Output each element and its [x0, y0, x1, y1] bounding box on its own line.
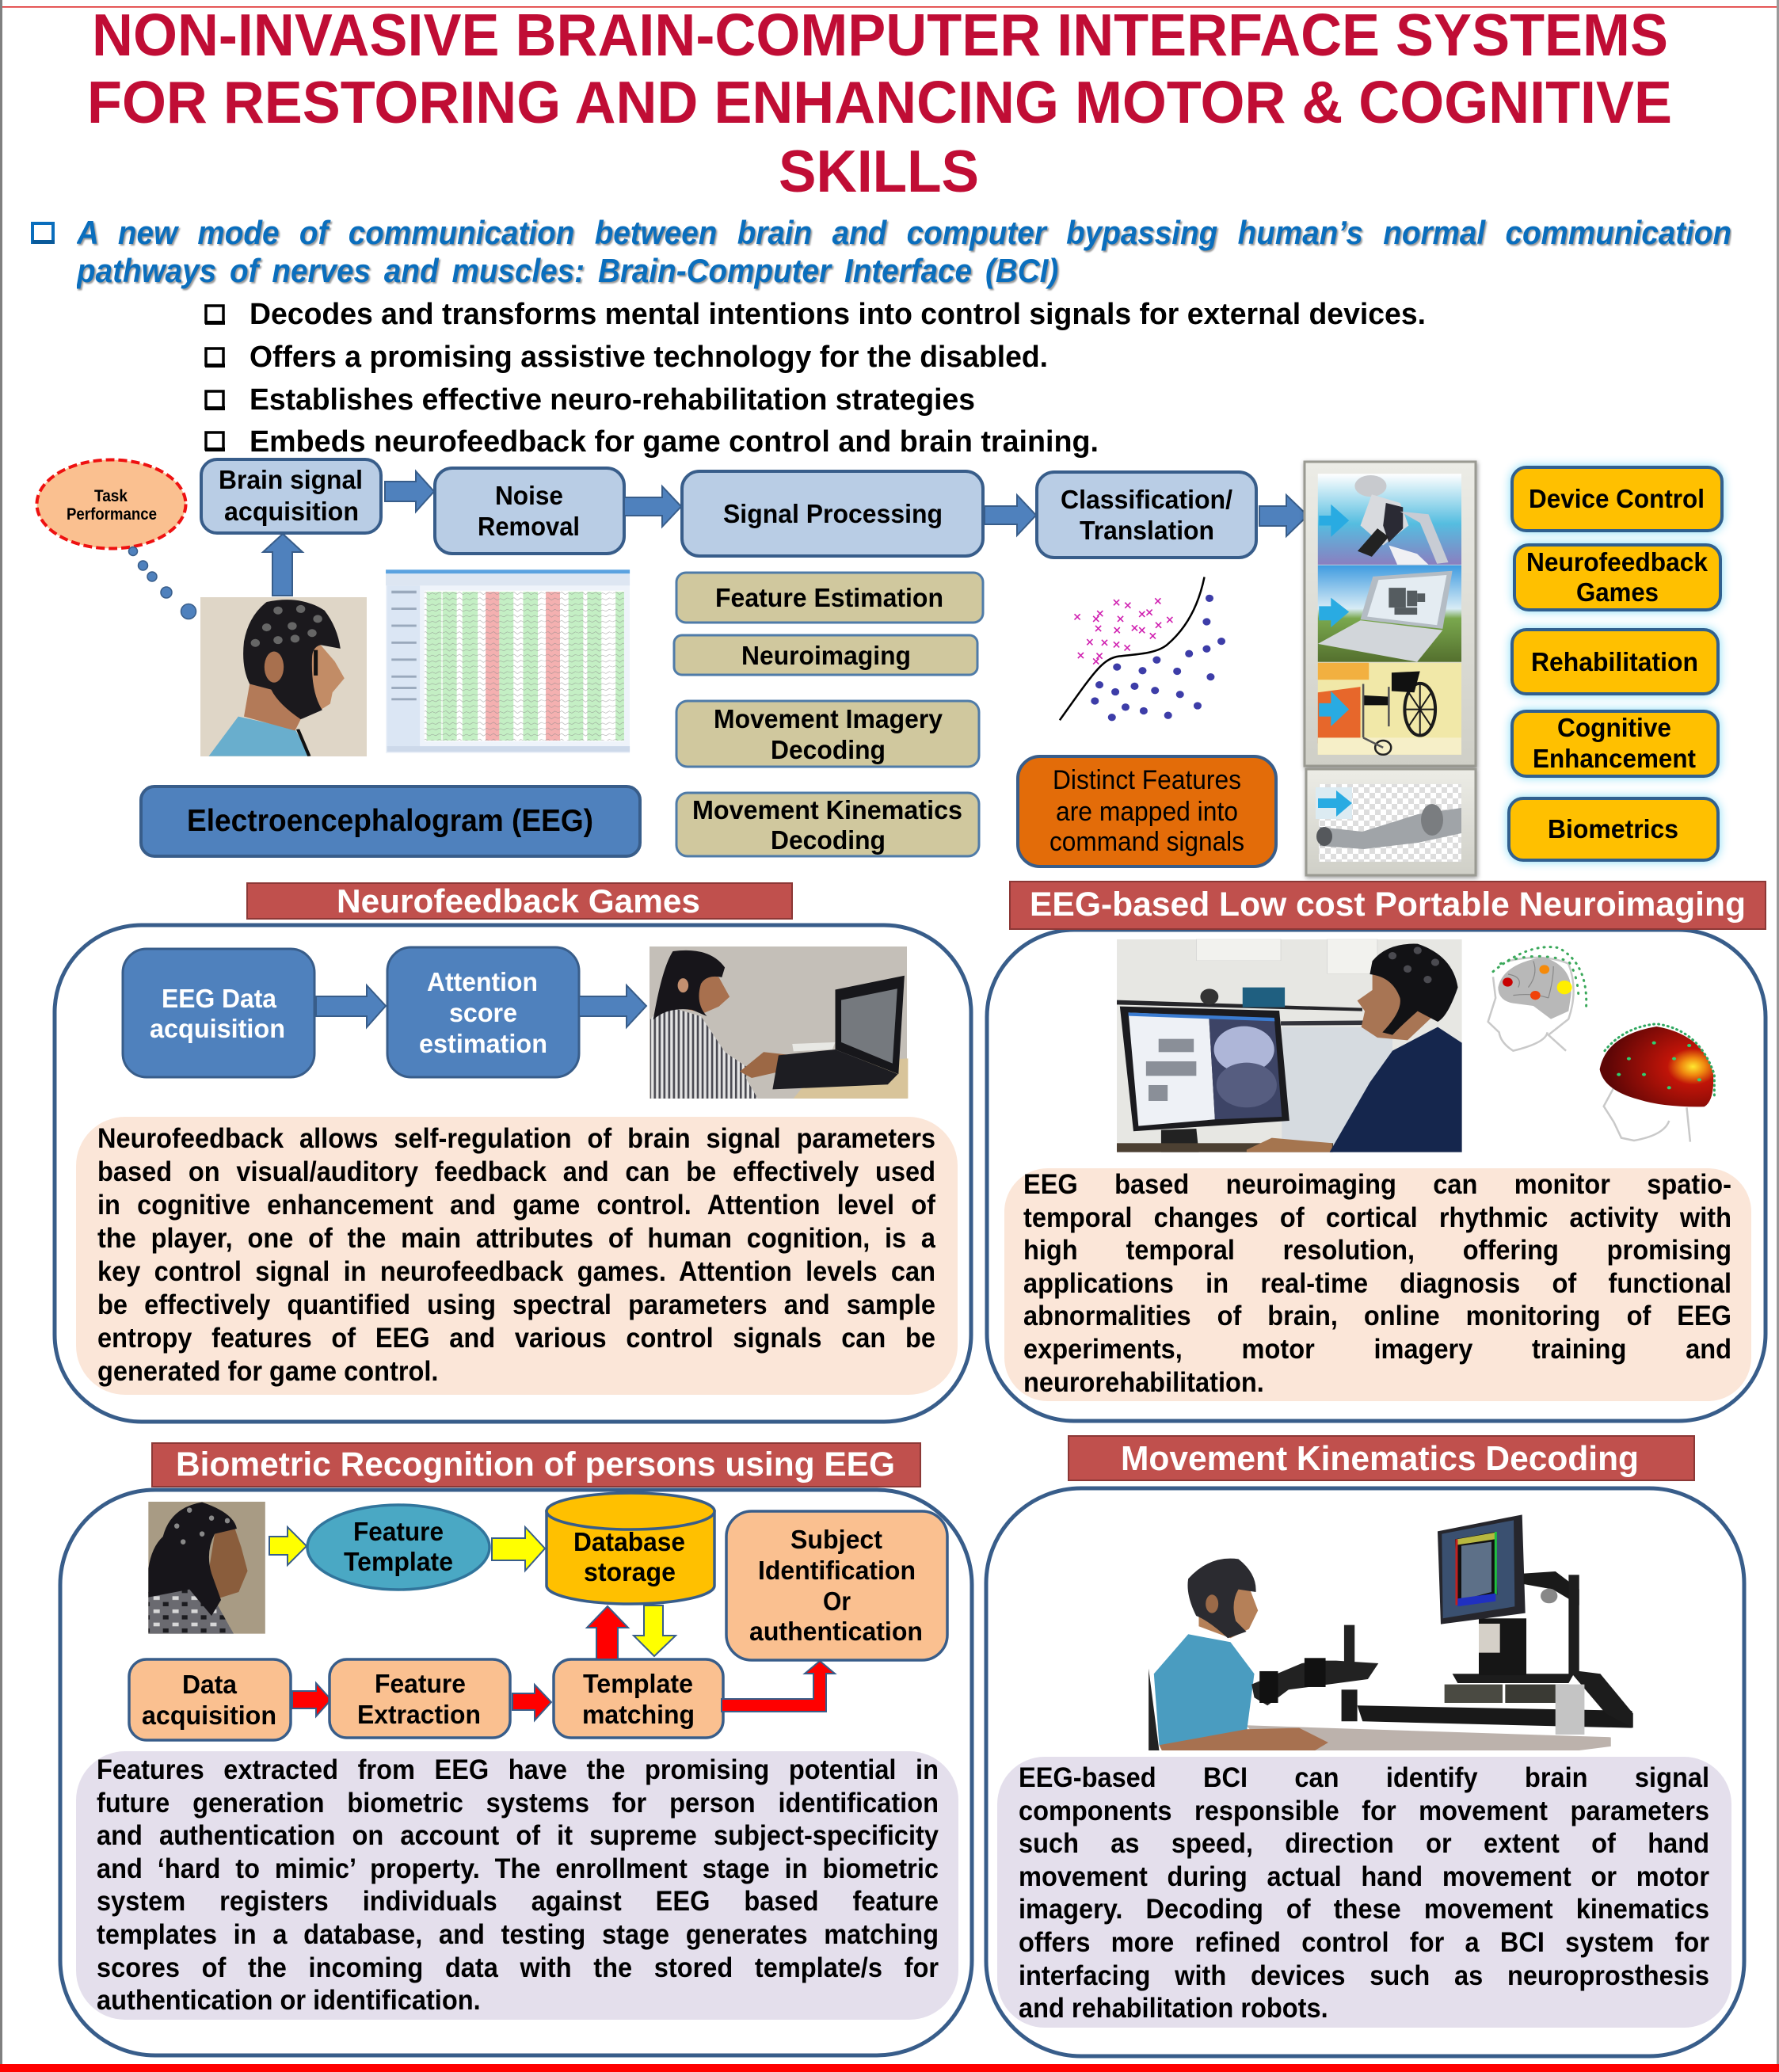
panel: movement kinematics [986, 1436, 1744, 2056]
flow: signal processing: Signal Processing [723, 499, 943, 528]
text block: neuroimaging: abnormalities of brain, online monitoring of EEG [1023, 1301, 1731, 1331]
heading: neurofeedback games: Neurofeedback Games [337, 882, 700, 920]
output: cognitive enhancement: Cognitive [1557, 713, 1671, 742]
bullet list [205, 298, 1426, 459]
output: cognitive enhancement [1512, 711, 1718, 776]
text block: biometrics: and authentication on account of it supreme subject-specificity [97, 1820, 939, 1851]
arrow [492, 1527, 545, 1571]
panel: biometric recognition [60, 1443, 972, 2055]
movement kinematics decoding box: Decoding [771, 825, 886, 855]
feature template ellipse: Template [344, 1547, 453, 1576]
arrow [385, 471, 434, 512]
movement imagery decoding box: Decoding [771, 735, 886, 764]
EEG signal screenshot [386, 569, 630, 753]
text block: neuroimaging [1004, 1168, 1751, 1401]
subject identification box: authentication [749, 1617, 923, 1646]
photo: biometric subject [148, 1502, 265, 1634]
arrow [316, 985, 386, 1027]
elbow arrow to identification [722, 1661, 835, 1712]
bullet list: Offers a promising assistive technology for the disabled. [250, 341, 1048, 374]
text block: kinematics: EEG-based BCI can identify brain signal [1019, 1762, 1709, 1793]
feature estimation box [676, 573, 983, 623]
bullet list: Decodes and transforms mental intentions into control signals for external devices. [250, 298, 1426, 331]
database cylinder [547, 1493, 714, 1604]
text block: neurofeedback: in cognitive enhancement and game control. Attention level of [97, 1190, 935, 1221]
text block: neurofeedback [76, 1117, 958, 1395]
arrow [579, 985, 646, 1027]
image: wheelchair [1318, 663, 1461, 755]
prosthetic arm image [1306, 769, 1476, 875]
arrow up to database [587, 1606, 628, 1659]
flow: noise removal: Removal [478, 512, 580, 541]
template matching box [554, 1659, 723, 1738]
data acquisition box: acquisition [142, 1701, 276, 1730]
text block: kinematics: such as speed, direction or extent of hand [1019, 1828, 1709, 1859]
output: cognitive enhancement: Enhancement [1533, 744, 1696, 773]
heading: neuroimaging: EEG-based Low cost Portable Neuroimaging [1030, 886, 1746, 924]
text block: biometrics: Features extracted from EEG have the promising potential in [97, 1754, 939, 1785]
text block: neurofeedback: key control signal in neurofeedback games. Attention levels can [97, 1256, 935, 1287]
text block: neurofeedback: generated for game control. [97, 1356, 438, 1387]
text block: kinematics: and rehabilitation robots. [1019, 1993, 1328, 2024]
intro heading with bullet: A new mode of communication between brain and computer bypassing human’s normal communication [77, 214, 1731, 251]
flow: classification [1037, 472, 1256, 558]
box: attention score estimation: estimation [419, 1029, 547, 1058]
flow: classification: Classification/ [1061, 485, 1232, 514]
box: EEG data acquisition [123, 949, 314, 1077]
photo: neurofeedback game player [650, 946, 908, 1099]
output: biometrics: Biometrics [1548, 814, 1678, 844]
text block: kinematics: interfacing with devices such as neuroprosthesis [1019, 1960, 1709, 1991]
template matching box: Template [583, 1669, 693, 1698]
output: neurofeedback games: Games [1576, 577, 1659, 607]
subject identification box [726, 1511, 947, 1660]
bullet list: Establishes effective neuro-rehabilitation strategies [250, 383, 975, 417]
distinct features callout: command signals [1049, 827, 1244, 857]
arrow [512, 1685, 551, 1720]
flow: brain signal acquisition [201, 459, 381, 533]
feature template ellipse: Feature [353, 1517, 444, 1546]
text block: neurofeedback: Neurofeedback allows self-regulation of brain signal parameters [97, 1123, 935, 1154]
arrow up [263, 534, 303, 596]
output: biometrics [1509, 798, 1718, 860]
flow: brain signal acquisition: Brain signal [219, 465, 363, 494]
task performance thought bubble [36, 459, 219, 640]
panel: neurofeedback games [55, 882, 971, 1422]
arrow [269, 1527, 307, 1565]
flow: classification: Translation [1080, 516, 1214, 545]
text block: neuroimaging: applications in real-time diagnosis of functional [1023, 1268, 1731, 1299]
scatter plot classifier [1060, 577, 1225, 721]
title: FOR RESTORING AND ENHANCING MOTOR & COGNITIVE [87, 69, 1672, 135]
text block: biometrics: authentication or identification. [97, 1985, 481, 2016]
task performance thought bubble: Task [94, 487, 128, 505]
heading: neurofeedback games [247, 882, 792, 920]
distinct features callout: Distinct Features [1053, 765, 1241, 795]
text block: biometrics: future generation biometric systems for person identification [97, 1788, 939, 1819]
flow: brain signal acquisition: acquisition [224, 497, 359, 526]
arrow [292, 1683, 331, 1716]
text block: neurofeedback: the player, one of the main attributes of human cognition, is a [97, 1223, 935, 1254]
box: attention score estimation: score [449, 998, 517, 1027]
output: device control [1512, 467, 1722, 531]
arrow [985, 495, 1036, 535]
subject identification box: Identification [758, 1556, 916, 1585]
flow: noise removal [435, 468, 624, 554]
brain with electrodes diagram [1488, 947, 1587, 1051]
movement kinematics decoding box: Movement Kinematics [692, 795, 962, 825]
text block: neuroimaging: experiments, motor imagery training and [1023, 1334, 1731, 1365]
movement imagery decoding box [676, 701, 979, 767]
output: rehabilitation [1512, 630, 1718, 694]
feature template ellipse [307, 1505, 490, 1590]
movement kinematics decoding box [676, 793, 979, 856]
text block: neurofeedback: be effectively quantified using spectral parameters and sample [97, 1289, 935, 1320]
text block: biometrics: templates in a database, and testing stage generates matching [97, 1919, 939, 1950]
distinct features callout [1018, 756, 1276, 867]
text block: biometrics: scores of the incoming data with the stored template/s for [97, 1952, 939, 1983]
panel: portable neuroimaging [987, 882, 1766, 1421]
electroencephalogram label: Electroencephalogram (EEG) [187, 804, 593, 838]
arrow down from database [634, 1605, 676, 1656]
photo: neuroimaging workstation [1117, 939, 1462, 1152]
text block: neuroimaging: high temporal resolution, offering promising [1023, 1235, 1731, 1266]
distinct features callout: are mapped into [1056, 797, 1238, 827]
flow: noise removal: Noise [495, 481, 563, 510]
photo: EEG cap subject [200, 597, 367, 756]
title: SKILLS [779, 138, 979, 204]
movement imagery decoding box: Movement Imagery [714, 704, 943, 733]
text block: biometrics: and ‘hard to mimic’ property. The enrollment stage in biometric [97, 1853, 939, 1884]
text block: neurofeedback: entropy features of EEG and various control signals can be [97, 1323, 935, 1354]
feature extraction box: Extraction [357, 1700, 481, 1729]
feature extraction box: Feature [375, 1669, 466, 1698]
text block: kinematics [997, 1757, 1731, 2028]
text block: neuroimaging: EEG based neuroimaging can monitor spatio- [1023, 1169, 1731, 1200]
feature extraction box [330, 1659, 510, 1738]
photo: robotic arm experiment [1149, 1514, 1633, 1750]
heading: movement kinematics: Movement Kinematics Decoding [1121, 1439, 1639, 1478]
intro heading with bullet: pathways of nerves and muscles: Brain-Computer Interface (BCI) [77, 252, 1058, 289]
data acquisition box [129, 1659, 291, 1740]
electroencephalogram label [141, 787, 640, 856]
output: device control: Device Control [1529, 484, 1705, 513]
image: laptop [1318, 566, 1461, 662]
database cylinder: storage [584, 1557, 676, 1586]
text block: neuroimaging: temporal changes of cortical rhythmic activity with [1023, 1202, 1731, 1233]
box: attention score estimation [387, 947, 579, 1077]
text block: biometrics: system registers individuals against EEG based feature [97, 1886, 939, 1917]
box: EEG data acquisition: EEG Data [162, 984, 277, 1013]
box: EEG data acquisition: acquisition [150, 1014, 285, 1043]
output: rehabilitation: Rehabilitation [1531, 647, 1698, 676]
output: neurofeedback games [1514, 545, 1720, 610]
output: neurofeedback games: Neurofeedback [1526, 547, 1709, 577]
database cylinder: Database [573, 1527, 685, 1556]
bullet list: Embeds neurofeedback for game control and brain training. [250, 425, 1099, 459]
task performance thought bubble: Performance [67, 505, 157, 524]
arrow [624, 486, 681, 527]
text block: neurofeedback: based on visual/auditory feedback and can be effectively used [97, 1156, 935, 1187]
flow: signal processing [682, 471, 983, 556]
box: attention score estimation: Attention [427, 967, 538, 996]
text block: kinematics: components responsible for movement parameters [1019, 1796, 1709, 1826]
text block: biometrics [76, 1751, 958, 2021]
subject identification box: Or [823, 1586, 851, 1616]
neuroimaging box: Neuroimaging [741, 641, 911, 670]
text block: kinematics: imagery. Decoding of these movement kinematics [1019, 1894, 1709, 1925]
image: robot [1318, 474, 1461, 565]
text block: kinematics: movement during actual hand movement or motor [1019, 1861, 1709, 1892]
template matching box: matching [582, 1700, 695, 1729]
application images panel [1305, 462, 1476, 766]
heading: biometric recognition: Biometric Recognition of persons using EEG [176, 1445, 895, 1484]
scalp activation head map [1600, 1024, 1714, 1142]
text block: neuroimaging: neurorehabilitation. [1023, 1367, 1264, 1398]
title [87, 2, 1672, 204]
intro heading with bullet [32, 214, 1731, 293]
data acquisition box: Data [182, 1670, 238, 1699]
feature estimation box: Feature Estimation [715, 583, 943, 612]
subject identification box: Subject [790, 1525, 882, 1554]
text block: kinematics: offers more refined control for a BCI system for [1019, 1927, 1709, 1958]
title: NON-INVASIVE BRAIN-COMPUTER INTERFACE SYSTEMS [92, 2, 1668, 68]
neuroimaging box [674, 635, 977, 675]
arrow [1259, 495, 1308, 536]
